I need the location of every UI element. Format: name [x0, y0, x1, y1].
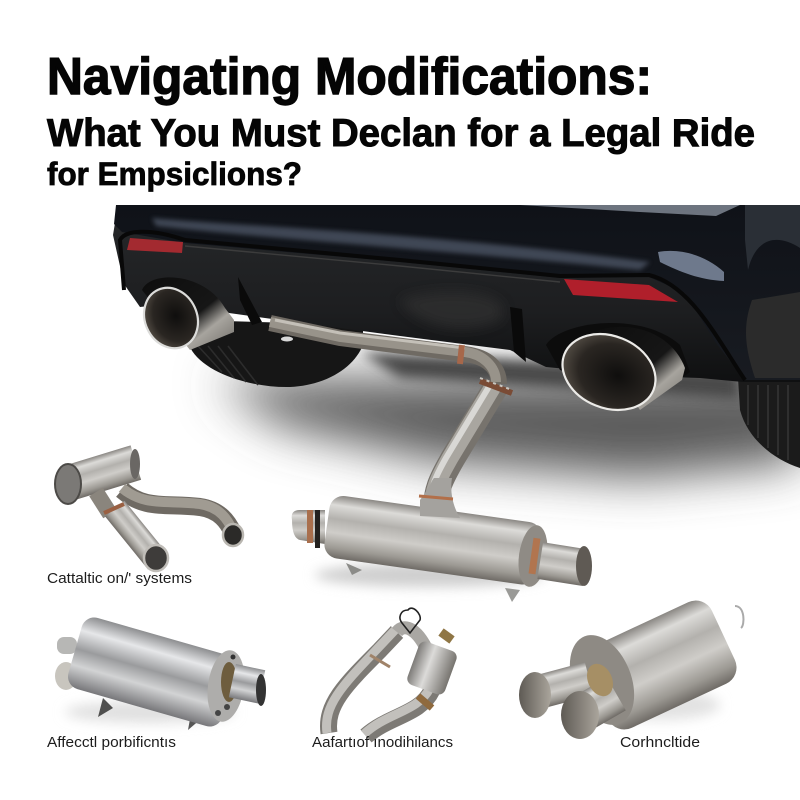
car body and bumper	[113, 205, 800, 382]
body highlights	[152, 205, 800, 378]
heading: subtitle line one: What You Must Declan for a Legal Ride	[47, 112, 755, 155]
left rear wheel	[189, 320, 363, 387]
label: catalytic systems: Cattaltic on/' systems	[47, 570, 192, 587]
underbody connecting pipe	[270, 320, 499, 384]
bumper trim line	[120, 232, 745, 380]
part: muffler, bottom left	[55, 614, 266, 730]
part: centre muffler	[292, 478, 592, 602]
part: twin outlet muffler, bottom right	[519, 595, 743, 739]
left reflector	[127, 238, 183, 253]
upper body panel	[114, 205, 800, 380]
heading: subtitle line two: for Empsiclions?	[47, 156, 302, 192]
right exhaust tip	[551, 321, 685, 423]
part: catalytic pipes, left	[55, 445, 243, 571]
right rear wheel	[738, 378, 800, 468]
label: affected prohibitions: Affecctl porbificntıs	[47, 734, 176, 751]
diffuser notches	[238, 277, 526, 362]
right reflector	[564, 279, 678, 302]
left exhaust tip	[134, 277, 234, 357]
downpipe to muffler	[429, 378, 512, 514]
heading: main title: Navigating Modifications:	[47, 48, 652, 106]
floor shadow under car	[215, 352, 800, 478]
part: bent pipe and converter, bottom centre	[326, 608, 459, 736]
label: modifications: Aafartıof ınodihilancs	[312, 734, 453, 751]
label: controlled: Corhncltide	[620, 734, 700, 751]
right exhaust recess	[546, 323, 690, 400]
title block	[47, 48, 755, 192]
photo: rear of car with exhaust	[113, 205, 800, 514]
